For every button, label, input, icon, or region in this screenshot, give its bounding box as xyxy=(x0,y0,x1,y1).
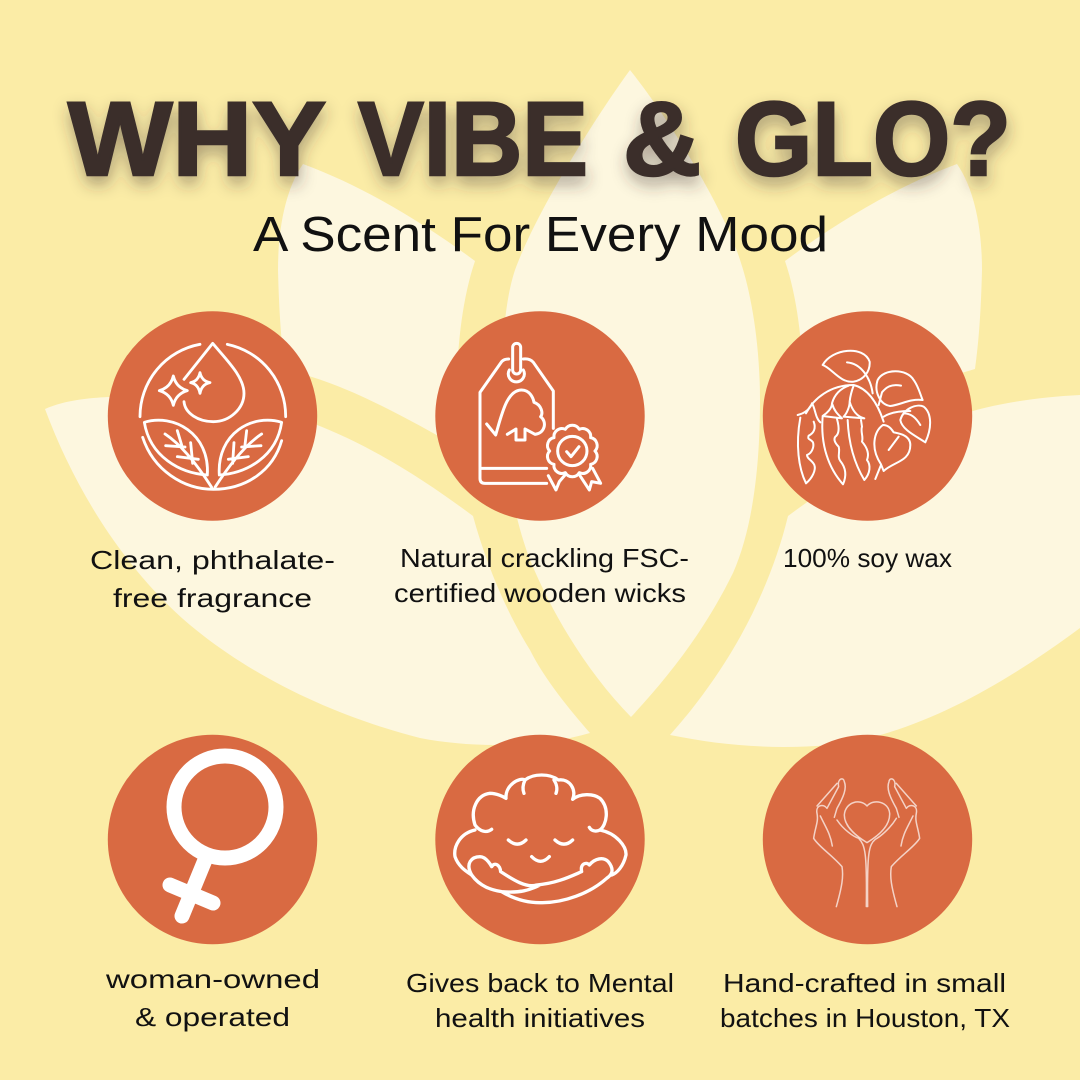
label: Clean, phthalate- xyxy=(90,545,335,575)
icon: drop and leaves xyxy=(140,343,286,489)
background: lotus flower xyxy=(45,70,1080,747)
icon: female symbol xyxy=(170,756,276,916)
label: certified wooden wicks xyxy=(394,578,686,608)
panel: soy wax xyxy=(763,311,972,573)
title: VIBE xyxy=(358,81,588,198)
label: Natural crackling FSC- xyxy=(400,543,689,573)
label: woman-owned xyxy=(105,964,320,994)
label: batches in Houston, TX xyxy=(720,1003,1010,1033)
icon: certified tag xyxy=(480,343,601,490)
panel: hand-crafted xyxy=(720,735,1010,1033)
label xyxy=(720,968,1010,1033)
label xyxy=(406,968,674,1033)
panel: clean fragrance xyxy=(90,311,335,613)
subtitle: A Scent For Every Mood xyxy=(253,208,828,262)
label: Hand-crafted in small xyxy=(723,968,1006,998)
label: & operated xyxy=(135,1002,290,1032)
label xyxy=(105,964,320,1032)
icon: soy plant xyxy=(798,351,930,484)
label: Gives back to Mental xyxy=(406,968,674,998)
icon: self-hugging cloud xyxy=(455,775,626,903)
label: free fragrance xyxy=(113,583,312,613)
label: health initiatives xyxy=(435,1003,645,1033)
title: GLO? xyxy=(735,81,1011,198)
title: & xyxy=(623,81,701,198)
title xyxy=(68,81,1011,198)
panel: mental health xyxy=(406,735,674,1033)
label: 100% soy wax xyxy=(783,543,952,573)
label xyxy=(394,543,689,608)
panel: wooden wicks xyxy=(394,311,689,608)
panel: woman-owned xyxy=(105,735,320,1032)
label xyxy=(90,545,335,613)
icon: hands holding heart xyxy=(814,779,920,907)
title: WHY xyxy=(68,81,326,198)
